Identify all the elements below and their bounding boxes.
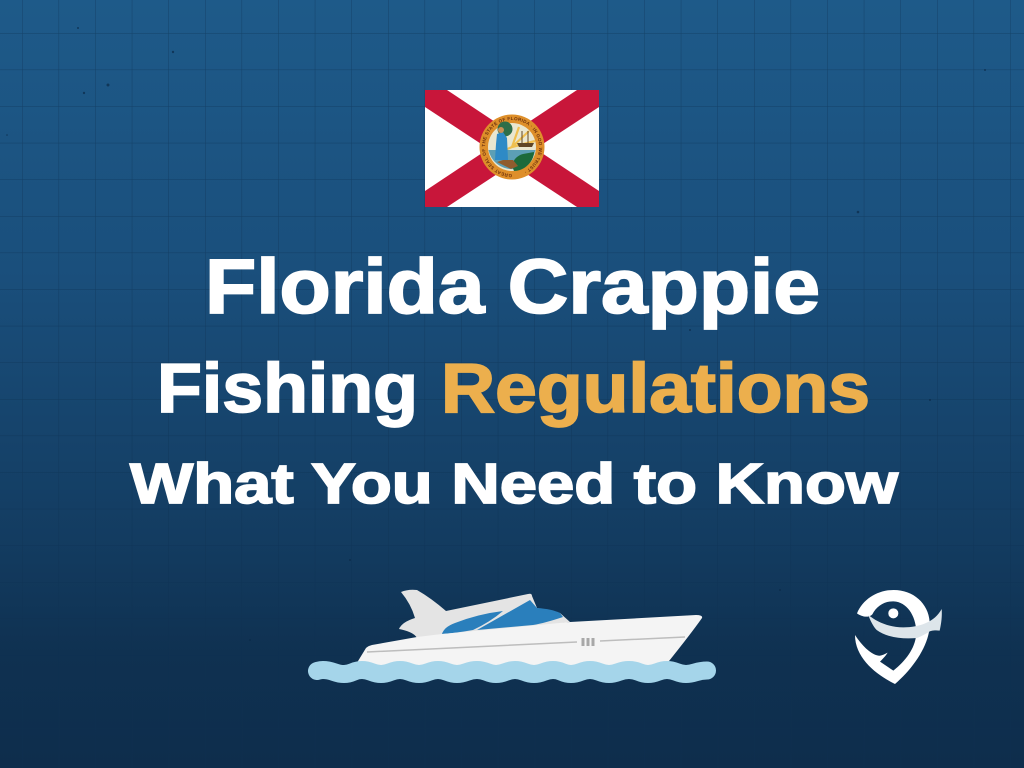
- water waves: [317, 670, 707, 674]
- heading line 2: [157, 349, 870, 427]
- icon: motor yacht on water: [317, 590, 707, 674]
- heading line 1: Florida Crappie: [205, 244, 820, 330]
- title: [130, 244, 899, 516]
- heading line 2: Regulations: [441, 349, 870, 427]
- icon: Florida state flag: [425, 90, 599, 207]
- icon: Florida state flag: GREAT SEAL OF THE STATE OF FLORIDA · IN GOD WE TRUST ·: [482, 116, 542, 178]
- heading line 2: Fishing: [157, 349, 418, 427]
- icon: fish hook logo: [855, 590, 942, 684]
- heading line 3: What You Need to Know: [130, 452, 899, 516]
